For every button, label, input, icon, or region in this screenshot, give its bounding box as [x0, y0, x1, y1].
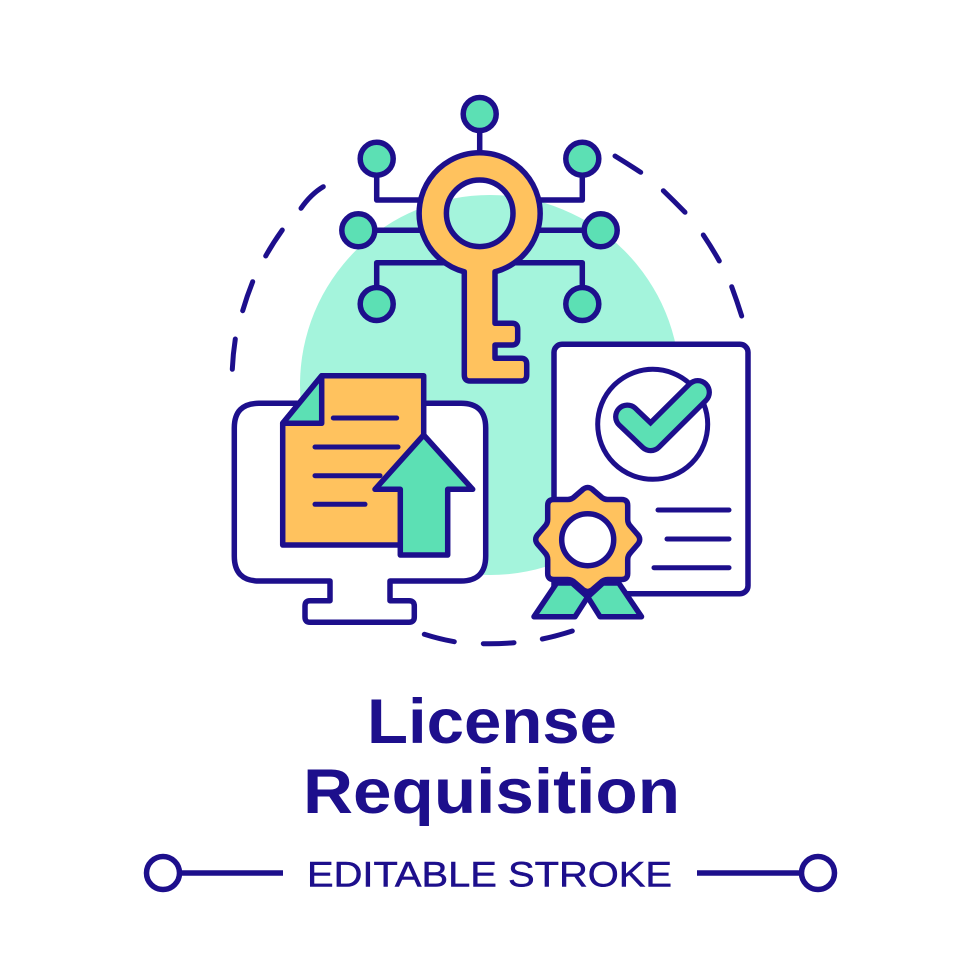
- title: License: [367, 687, 617, 757]
- footer label: EDITABLE STROKE: [307, 856, 672, 894]
- upload arrow: [375, 435, 473, 555]
- seal ribbons: [534, 583, 642, 617]
- document fold: [283, 376, 322, 423]
- title: Requisition: [303, 757, 680, 827]
- editable stroke footer: [146, 856, 834, 894]
- connectors: [375, 130, 584, 288]
- certificate sheet: [554, 344, 748, 594]
- seal badge: [536, 488, 640, 592]
- document lines: [315, 418, 398, 504]
- icon: key network: [342, 98, 617, 381]
- document: [283, 376, 424, 545]
- icon: certificate with seal: [534, 344, 748, 617]
- right connector: [697, 856, 834, 890]
- network nodes: [342, 98, 617, 320]
- check circle: [598, 369, 708, 479]
- seal center: [562, 514, 614, 566]
- certificate lines: [654, 510, 729, 568]
- monitor: [234, 403, 486, 622]
- title: [303, 687, 680, 827]
- check mark: [627, 392, 698, 439]
- key: [419, 153, 540, 381]
- dashed ring: [232, 156, 742, 644]
- icon: monitor with uploaded document: [234, 376, 486, 622]
- left connector: [146, 856, 283, 890]
- mint background circle: [300, 195, 680, 575]
